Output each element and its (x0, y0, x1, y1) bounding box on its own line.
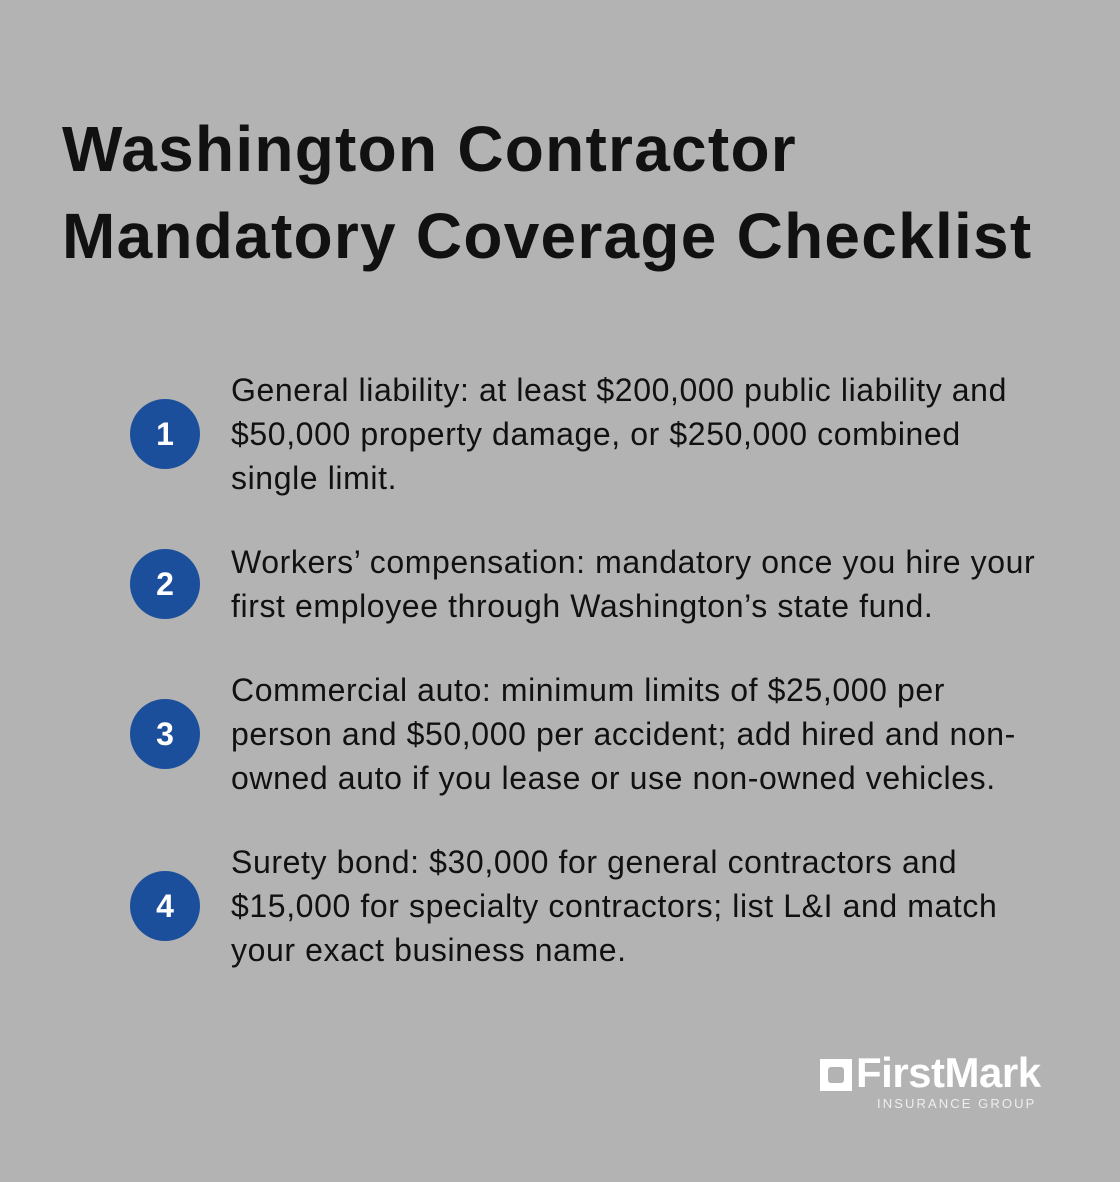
circle 4 (130, 871, 200, 941)
circle 3: 3 (156, 716, 174, 752)
item 3 (130, 672, 1016, 796)
logo (820, 1049, 1041, 1111)
circle 1 (130, 399, 200, 469)
item 4 (130, 844, 997, 968)
text 4: $15,000 for specialty contractors; list L&I and match (231, 888, 997, 924)
circle 2 (130, 549, 200, 619)
circle 2: 2 (156, 566, 174, 602)
title (62, 113, 1032, 272)
logo wordmark: FirstMark (856, 1049, 1041, 1096)
circle 3 (130, 699, 200, 769)
text 1: single limit. (231, 460, 397, 496)
text 4: Surety bond: $30,000 for general contractors and (231, 844, 957, 880)
text 3: owned auto if you lease or use non-owned vehicles. (231, 760, 996, 796)
text 3: person and $50,000 per accident; add hired and non- (231, 716, 1016, 752)
title: Washington Contractor (62, 113, 797, 185)
text 2: Workers’ compensation: mandatory once you hire your (231, 544, 1035, 580)
text 4: your exact business name. (231, 932, 627, 968)
text 3: Commercial auto: minimum limits of $25,000 per (231, 672, 945, 708)
circle 1: 1 (156, 416, 174, 452)
logo mark (820, 1059, 852, 1091)
text 4 (231, 844, 997, 968)
circle 4: 4 (156, 888, 174, 924)
text 1: General liability: at least $200,000 public liability and (231, 372, 1007, 408)
logo tagline: INSURANCE GROUP (877, 1096, 1036, 1111)
text 1: $50,000 property damage, or $250,000 combined (231, 416, 961, 452)
text 2 (231, 544, 1035, 624)
text 3 (231, 672, 1016, 796)
item 2 (130, 544, 1035, 624)
title: Mandatory Coverage Checklist (62, 200, 1032, 272)
text 1 (231, 372, 1007, 496)
text 2: first employee through Washington’s state fund. (231, 588, 933, 624)
item 1 (130, 372, 1007, 496)
